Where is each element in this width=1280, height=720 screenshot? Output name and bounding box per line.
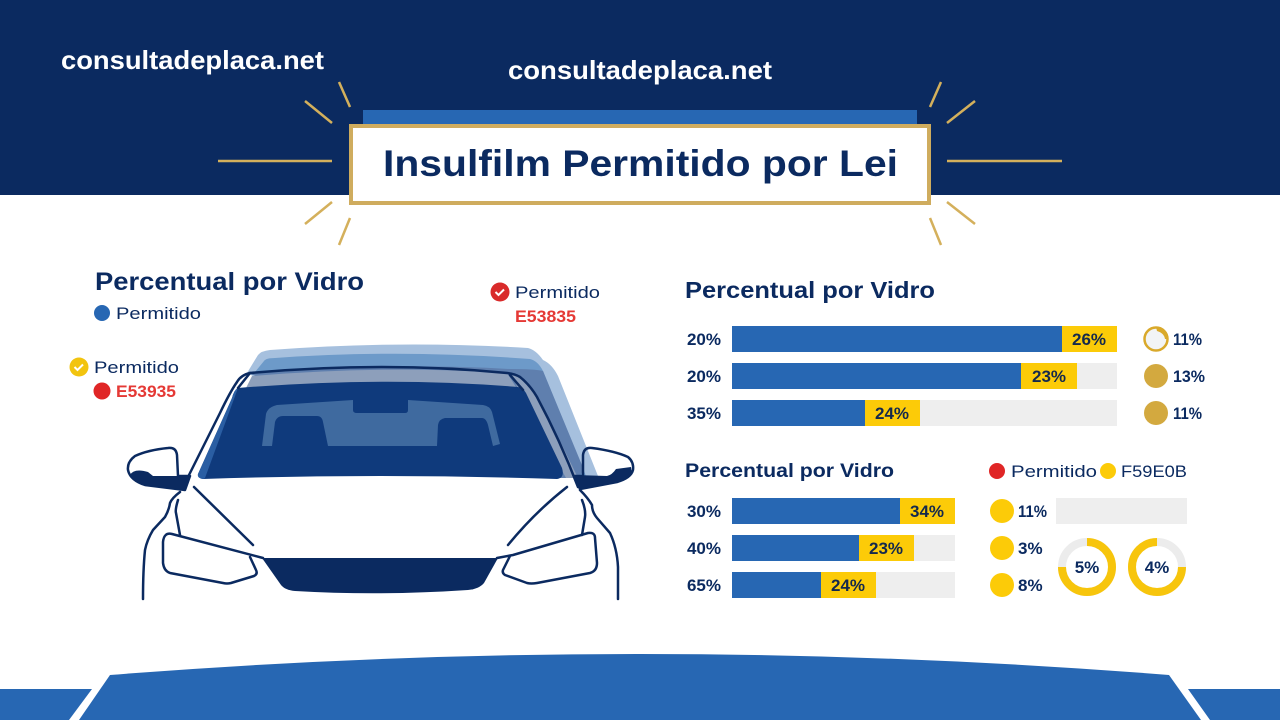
footer band left	[0, 689, 92, 720]
left headlight	[163, 534, 263, 584]
legend: permitido and F59E0B: Permitido	[1011, 462, 1097, 481]
hood creases	[194, 487, 253, 545]
dot 3%	[990, 536, 1043, 560]
callout: yellow check	[70, 358, 179, 401]
row 3: 35%	[687, 404, 721, 423]
panel: bottom bar chart	[685, 461, 955, 598]
pillar glass strip	[511, 375, 578, 478]
callout: red check: E53835	[515, 307, 576, 326]
grille	[262, 558, 498, 593]
row 2: 20%	[687, 367, 721, 386]
row 3	[687, 572, 955, 598]
title rays	[218, 82, 1062, 245]
side indicator 11% ring	[1144, 327, 1202, 350]
side indicator 11% ring: 11%	[1173, 330, 1202, 349]
dot 11%	[990, 499, 1047, 523]
panel: car diagram	[70, 268, 633, 599]
side indicator 11%	[1144, 401, 1202, 425]
donut 5%	[1062, 542, 1112, 592]
windshield left highlight	[198, 388, 238, 479]
row 1	[687, 326, 1117, 352]
car body outline	[143, 367, 618, 599]
row 1: 20%	[687, 330, 721, 349]
row 1	[687, 498, 955, 524]
car heading: Percentual por Vidro	[95, 268, 364, 296]
legend: permitido and F59E0B	[989, 462, 1187, 481]
row 1: 26%	[1072, 330, 1106, 349]
callout: red check: Permitido	[515, 283, 600, 302]
row 2	[687, 363, 1117, 389]
row 2: 23%	[1032, 367, 1066, 386]
windshield	[198, 382, 563, 479]
dot 3%: 3%	[1018, 539, 1043, 558]
brand label center: consultadeplaca.net	[508, 55, 772, 85]
bottom chart heading: Percentual por Vidro	[685, 461, 894, 482]
mirror right	[575, 448, 633, 489]
interior silhouette	[262, 400, 500, 446]
footer band right	[1188, 689, 1280, 720]
row 2: 23%	[869, 539, 903, 558]
title box: Insulfilm Permitido por Lei	[383, 143, 898, 184]
right headlight	[497, 533, 597, 584]
legend: permitido blue	[94, 304, 201, 323]
mirror left	[128, 448, 190, 490]
brand label left: consultadeplaca.net	[61, 45, 324, 75]
dot 8%	[990, 573, 1043, 597]
donut 4%: 4%	[1145, 558, 1169, 577]
callout: yellow check: Permitido	[94, 358, 179, 377]
row 2: 40%	[687, 539, 721, 558]
row 1: 34%	[910, 502, 944, 521]
row 3	[687, 400, 1117, 426]
dot 8%: 8%	[1018, 576, 1043, 595]
window tint layers	[247, 344, 598, 478]
empty gray bar	[1056, 498, 1187, 524]
donut 5%: 5%	[1075, 558, 1099, 577]
callout: red check	[490, 282, 600, 326]
header band	[0, 0, 1280, 195]
dot 11%: 11%	[1018, 502, 1047, 521]
row 3: 24%	[875, 404, 909, 423]
left fender	[143, 492, 180, 599]
footer car hood	[79, 654, 1201, 720]
row 1: 30%	[687, 502, 721, 521]
right fender	[580, 490, 618, 599]
donut 4%	[1132, 542, 1182, 592]
windshield visor	[246, 370, 516, 388]
row 3: 24%	[831, 576, 865, 595]
legend: permitido blue: Permitido	[116, 304, 201, 323]
panel: top bar chart	[685, 277, 1205, 426]
inner pillar right	[510, 375, 523, 390]
legend: permitido and F59E0B: F59E0B	[1121, 462, 1187, 481]
title box	[351, 126, 929, 203]
title blue tab	[363, 110, 917, 126]
side indicator 11%: 11%	[1173, 404, 1202, 423]
roof and pillars	[185, 367, 578, 487]
side indicator 13%	[1144, 364, 1205, 388]
side indicator 13%: 13%	[1173, 367, 1205, 386]
top chart heading: Percentual por Vidro	[685, 277, 935, 303]
row 2	[687, 535, 955, 561]
callout: yellow check: E53935	[116, 382, 176, 401]
row 3: 65%	[687, 576, 721, 595]
inner pillar left	[238, 373, 250, 388]
